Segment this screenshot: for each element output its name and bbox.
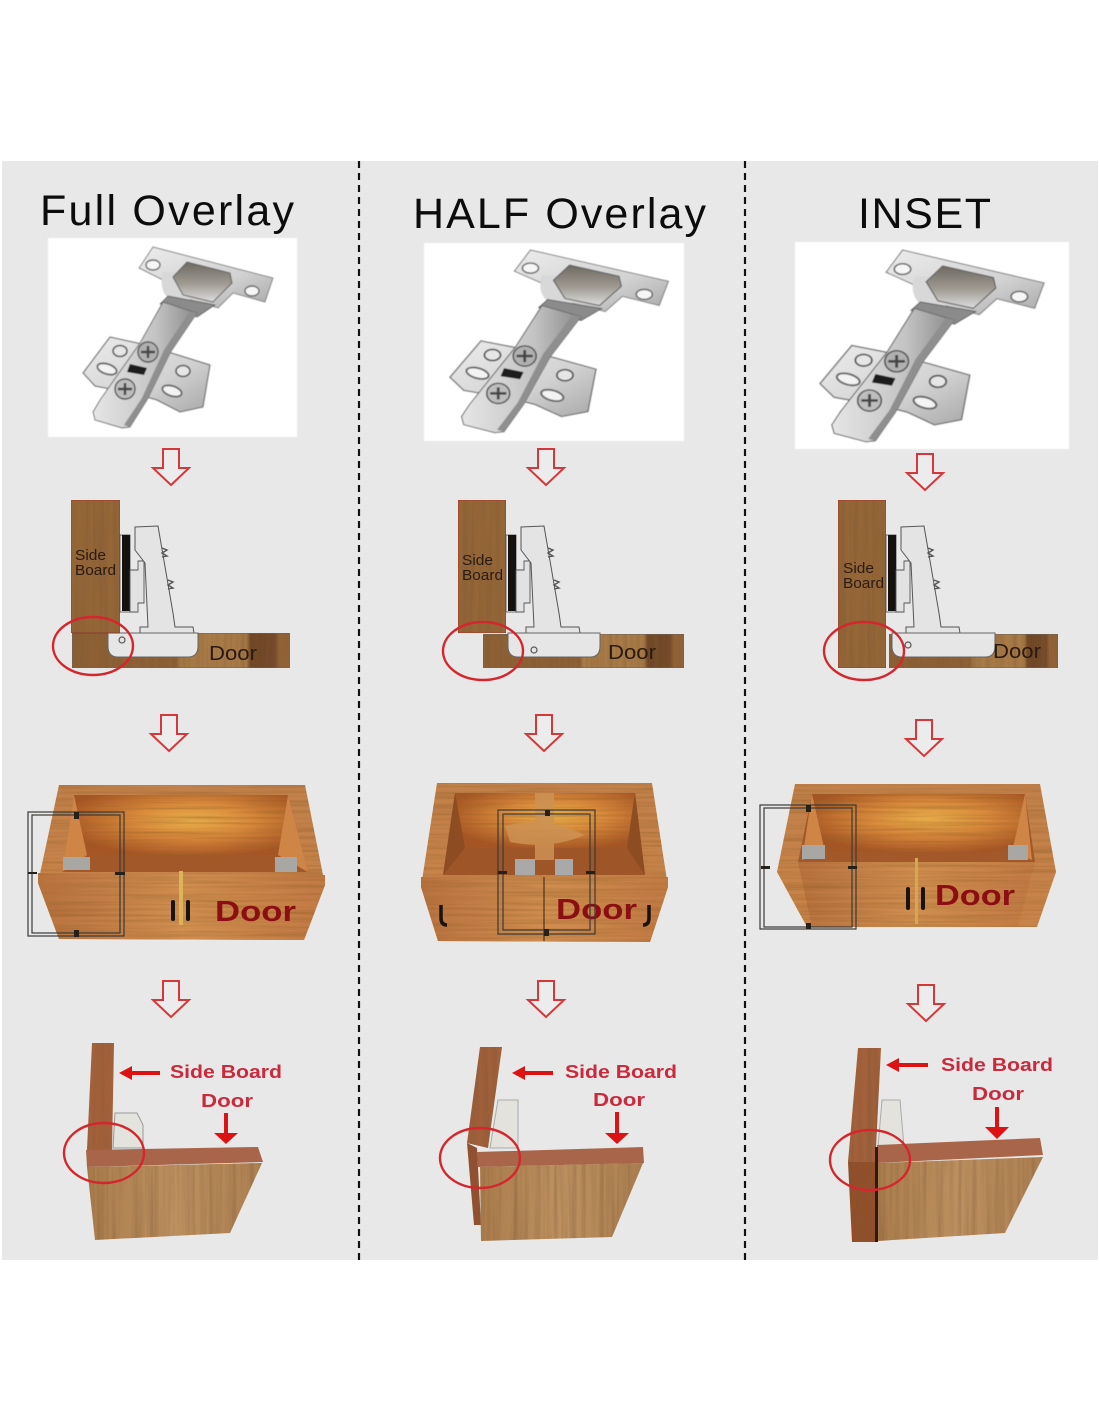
arrow: cabinet to photo: [528, 981, 564, 1017]
callout: half overlay labels: Side Board: [565, 1062, 677, 1082]
callout: half overlay labels: Door: [593, 1090, 645, 1110]
section diagram: inset: Door: [993, 641, 1041, 663]
heading: full overlay: Full Overlay: [40, 187, 294, 235]
door photo: half overlay: [467, 1047, 644, 1241]
heading: half overlay: HALF Overlay: [413, 190, 706, 238]
heading: inset: INSET: [858, 190, 991, 238]
photo: half overlay hinge: [424, 243, 684, 441]
door photo: inset: [848, 1048, 1043, 1242]
callout: inset labels: [830, 1055, 1053, 1190]
arrow: hinge to section: [153, 449, 189, 485]
photo: full overlay hinge: [48, 238, 297, 437]
panel: half overlay: [413, 190, 706, 1241]
cabinet: inset: Door: [935, 880, 1015, 912]
column divider: second: [744, 161, 746, 1260]
panel: inset: [760, 190, 1069, 1242]
section diagram: inset: Board: [843, 575, 884, 592]
photo: inset hinge: [795, 242, 1069, 449]
cabinet: full overlay: [28, 785, 325, 940]
callout: inset labels: Side Board: [941, 1055, 1053, 1075]
cabinet: half overlay: [421, 783, 668, 942]
section diagram: full overlay: Side: [75, 547, 106, 564]
section diagram: half overlay: Side: [462, 552, 493, 569]
section diagram: full overlay: [53, 500, 290, 675]
arrow: section to cabinet: [526, 715, 562, 751]
background panel: [2, 161, 1098, 1260]
cabinet: full overlay: Door: [215, 896, 296, 928]
panel: full overlay: [28, 187, 325, 1240]
column divider: first: [358, 161, 360, 1260]
callout: inset labels: Door: [972, 1084, 1024, 1104]
arrow: hinge to section: [907, 454, 943, 490]
callout: full overlay labels: [64, 1062, 282, 1183]
door photo: full overlay: [86, 1043, 263, 1240]
cabinet: half overlay: Door: [556, 894, 637, 926]
arrow: cabinet to photo: [153, 981, 189, 1017]
callout: full overlay labels: Door: [201, 1091, 253, 1111]
callout: full overlay labels: Side Board: [170, 1062, 282, 1082]
callout: half overlay labels: [440, 1062, 677, 1188]
cabinet: inset: [760, 784, 1056, 929]
section diagram: half overlay: [443, 500, 684, 680]
arrow: section to cabinet: [151, 715, 187, 751]
arrow: cabinet to photo: [908, 985, 944, 1021]
section diagram: half overlay: Board: [462, 567, 503, 584]
arrow: section to cabinet: [906, 720, 942, 756]
section diagram: full overlay: Board: [75, 562, 116, 579]
section diagram: half overlay: Door: [608, 642, 656, 664]
section diagram: inset: [824, 500, 1058, 680]
section diagram: inset: Side: [843, 560, 874, 577]
arrow: hinge to section: [528, 449, 564, 485]
section diagram: full overlay: Door: [209, 643, 257, 665]
